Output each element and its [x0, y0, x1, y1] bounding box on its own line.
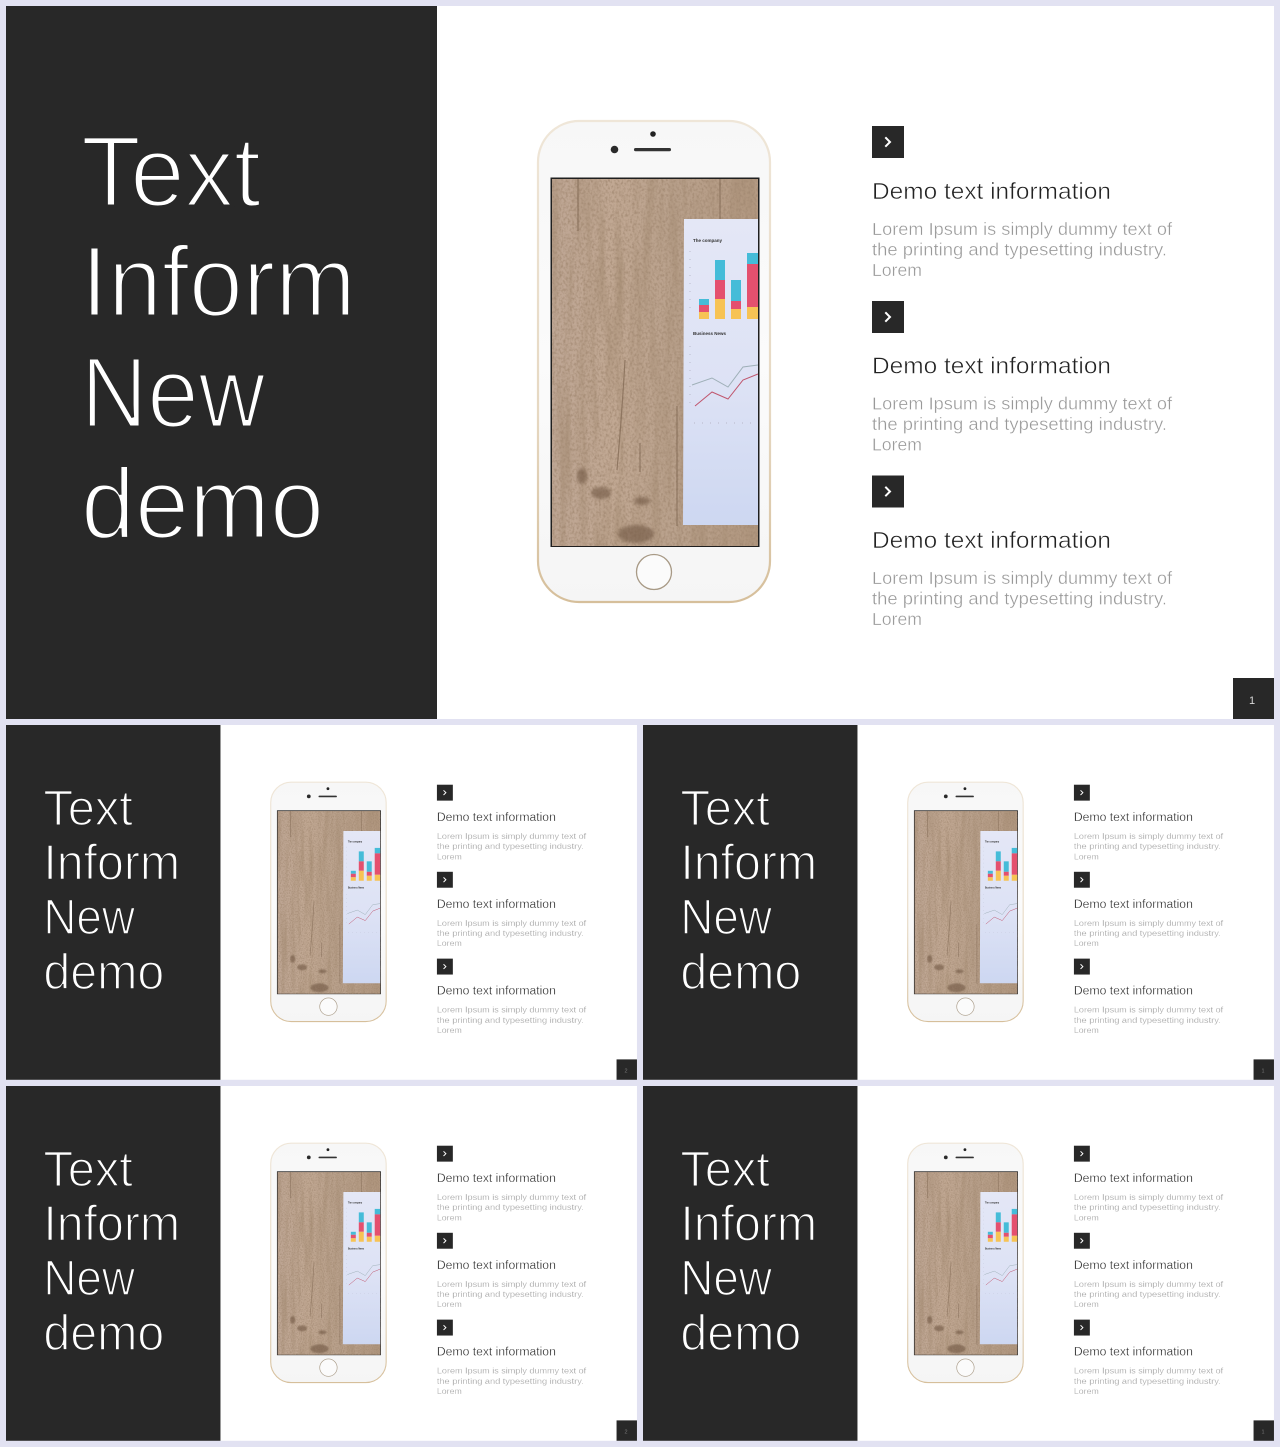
text block 2: Lorem: [437, 1299, 462, 1309]
text block 3: Demo text information: [1074, 1346, 1193, 1359]
text block 1: Lorem: [1074, 1212, 1099, 1222]
title: demo: [43, 944, 164, 1000]
text block 2: the printing and typesetting industry.: [872, 414, 1167, 434]
text block 1: Lorem: [872, 260, 922, 280]
text block 1: [872, 126, 1172, 280]
text block 1: the printing and typesetting industry.: [1074, 1202, 1221, 1212]
text block 3: Lorem: [1074, 1386, 1099, 1396]
text block 2: the printing and typesetting industry.: [437, 1289, 584, 1299]
text block 1: Demo text information: [872, 178, 1111, 204]
text block 2: the printing and typesetting industry.: [1074, 1289, 1221, 1299]
title: Text: [81, 116, 261, 228]
title: Inform: [43, 1195, 180, 1251]
text block 3: Demo text information: [1074, 985, 1193, 998]
text block 2: Demo text information: [437, 1259, 556, 1272]
title: [680, 1141, 817, 1361]
title: Text: [680, 780, 770, 836]
text block 1: the printing and typesetting industry.: [437, 1202, 584, 1212]
icon: smartphone with chart photo: [908, 782, 1023, 1022]
text block 2: the printing and typesetting industry.: [437, 928, 584, 938]
text block 3: Lorem Ipsum is simply dummy text of: [437, 1366, 587, 1376]
text block 1: Lorem: [1074, 851, 1099, 861]
text block 3: [872, 476, 1172, 629]
text block 3: Lorem Ipsum is simply dummy text of: [1074, 1005, 1224, 1015]
text block 3: the printing and typesetting industry.: [1074, 1376, 1221, 1386]
text block 1: Lorem Ipsum is simply dummy text of: [437, 1192, 587, 1202]
text block 1: Lorem Ipsum is simply dummy text of: [1074, 1192, 1224, 1202]
text block 3: the printing and typesetting industry.: [437, 1376, 584, 1386]
panel: dark title sidebar: [6, 6, 437, 719]
title: demo: [680, 1305, 801, 1361]
panel: slide thumbnail bottom right: [643, 1086, 1274, 1441]
title: New: [680, 1250, 773, 1306]
page number badge: [617, 1059, 637, 1080]
text block 2: Lorem Ipsum is simply dummy text of: [1074, 918, 1224, 928]
title: New: [43, 1250, 136, 1306]
text block 3: [437, 1320, 587, 1396]
text block 3: Lorem: [872, 609, 922, 629]
title: demo: [43, 1305, 164, 1361]
text block 3: [437, 959, 587, 1035]
text block 3: Lorem Ipsum is simply dummy text of: [437, 1005, 587, 1015]
text block 1: Demo text information: [1074, 811, 1193, 824]
text block 2: [1074, 1233, 1224, 1309]
title: [680, 780, 817, 1000]
text block 1: Lorem: [437, 851, 462, 861]
text block 2: [1074, 872, 1224, 948]
text block 1: the printing and typesetting industry.: [872, 240, 1167, 260]
text block 1: the printing and typesetting industry.: [437, 841, 584, 851]
title: demo: [680, 944, 801, 1000]
text block 1: the printing and typesetting industry.: [1074, 841, 1221, 851]
title: Inform: [81, 226, 356, 338]
text block 2: the printing and typesetting industry.: [1074, 928, 1221, 938]
text block 2: Demo text information: [437, 898, 556, 911]
icon: smartphone with chart photo: [271, 782, 386, 1022]
text block 2: Lorem Ipsum is simply dummy text of: [437, 1279, 587, 1289]
panel: dark title sidebar: [6, 1086, 220, 1441]
text block 3: the printing and typesetting industry.: [872, 588, 1167, 608]
text block 2: Demo text information: [1074, 1259, 1193, 1272]
text block 1: [437, 785, 587, 861]
title: Inform: [43, 834, 180, 890]
text block 3: the printing and typesetting industry.: [1074, 1015, 1221, 1025]
title: Inform: [680, 1195, 817, 1251]
icon: smartphone with chart photo: [271, 1143, 386, 1383]
panel: dark title sidebar: [6, 725, 220, 1080]
page number badge: [1254, 1059, 1274, 1080]
page number badge: [1233, 678, 1274, 719]
text block 3: Demo text information: [437, 985, 556, 998]
text block 3: Lorem: [437, 1386, 462, 1396]
icon: smartphone with chart photo: [908, 1143, 1023, 1383]
text block 1: Demo text information: [1074, 1172, 1193, 1185]
text block 3: Demo text information: [872, 527, 1111, 553]
text block 2: Lorem: [437, 938, 462, 948]
text block 1: [437, 1146, 587, 1222]
title: Text: [43, 1141, 133, 1197]
text block 2: Demo text information: [1074, 898, 1193, 911]
text block 2: Lorem: [1074, 938, 1099, 948]
text block 1: [1074, 785, 1224, 861]
panel: dark title sidebar: [643, 725, 857, 1080]
page number badge: 1: [1261, 1068, 1265, 1074]
text block 1: Lorem: [437, 1212, 462, 1222]
text block 3: Lorem Ipsum is simply dummy text of: [1074, 1366, 1224, 1376]
title: New: [43, 889, 136, 945]
text block 3: Lorem: [437, 1025, 462, 1035]
text block 2: [437, 1233, 587, 1309]
icon: smartphone with chart photo: [538, 121, 770, 602]
text block 2: [437, 872, 587, 948]
text block 1: Demo text information: [437, 811, 556, 824]
title: [43, 780, 180, 1000]
text block 1: Demo text information: [437, 1172, 556, 1185]
text block 3: Lorem: [1074, 1025, 1099, 1035]
text block 2: Lorem Ipsum is simply dummy text of: [872, 394, 1172, 414]
title: Text: [680, 1141, 770, 1197]
text block 1: [1074, 1146, 1224, 1222]
text block 1: Lorem Ipsum is simply dummy text of: [872, 219, 1172, 239]
title: [43, 1141, 180, 1361]
title: New: [81, 337, 266, 449]
page number badge: [1254, 1420, 1274, 1441]
page number badge: 2: [624, 1429, 628, 1435]
text block 2: Lorem: [872, 434, 922, 454]
text block 3: the printing and typesetting industry.: [437, 1015, 584, 1025]
text block 2: Lorem Ipsum is simply dummy text of: [1074, 1279, 1224, 1289]
title: New: [680, 889, 773, 945]
text block 1: Lorem Ipsum is simply dummy text of: [1074, 831, 1224, 841]
page number badge: [617, 1420, 637, 1441]
panel: main slide: [6, 6, 1274, 719]
panel: slide thumbnail bottom left: [6, 1086, 637, 1441]
text block 3: [1074, 959, 1224, 1035]
panel: slide thumbnail top left: [6, 725, 637, 1080]
page number badge: 1: [1261, 1429, 1265, 1435]
text block 2: Lorem Ipsum is simply dummy text of: [437, 918, 587, 928]
panel: dark title sidebar: [643, 1086, 857, 1441]
text block 3: Lorem Ipsum is simply dummy text of: [872, 568, 1172, 588]
text block 2: Lorem: [1074, 1299, 1099, 1309]
text block 1: Lorem Ipsum is simply dummy text of: [437, 831, 587, 841]
text block 2: [872, 301, 1172, 454]
panel: slide thumbnail top right: [643, 725, 1274, 1080]
title: demo: [81, 448, 324, 560]
text block 3: [1074, 1320, 1224, 1396]
page number badge: 1: [1249, 695, 1255, 707]
text block 2: Demo text information: [872, 352, 1111, 378]
page number badge: 2: [624, 1068, 628, 1074]
text block 3: Demo text information: [437, 1346, 556, 1359]
title: Text: [43, 780, 133, 836]
title: [81, 116, 356, 560]
title: Inform: [680, 834, 817, 890]
